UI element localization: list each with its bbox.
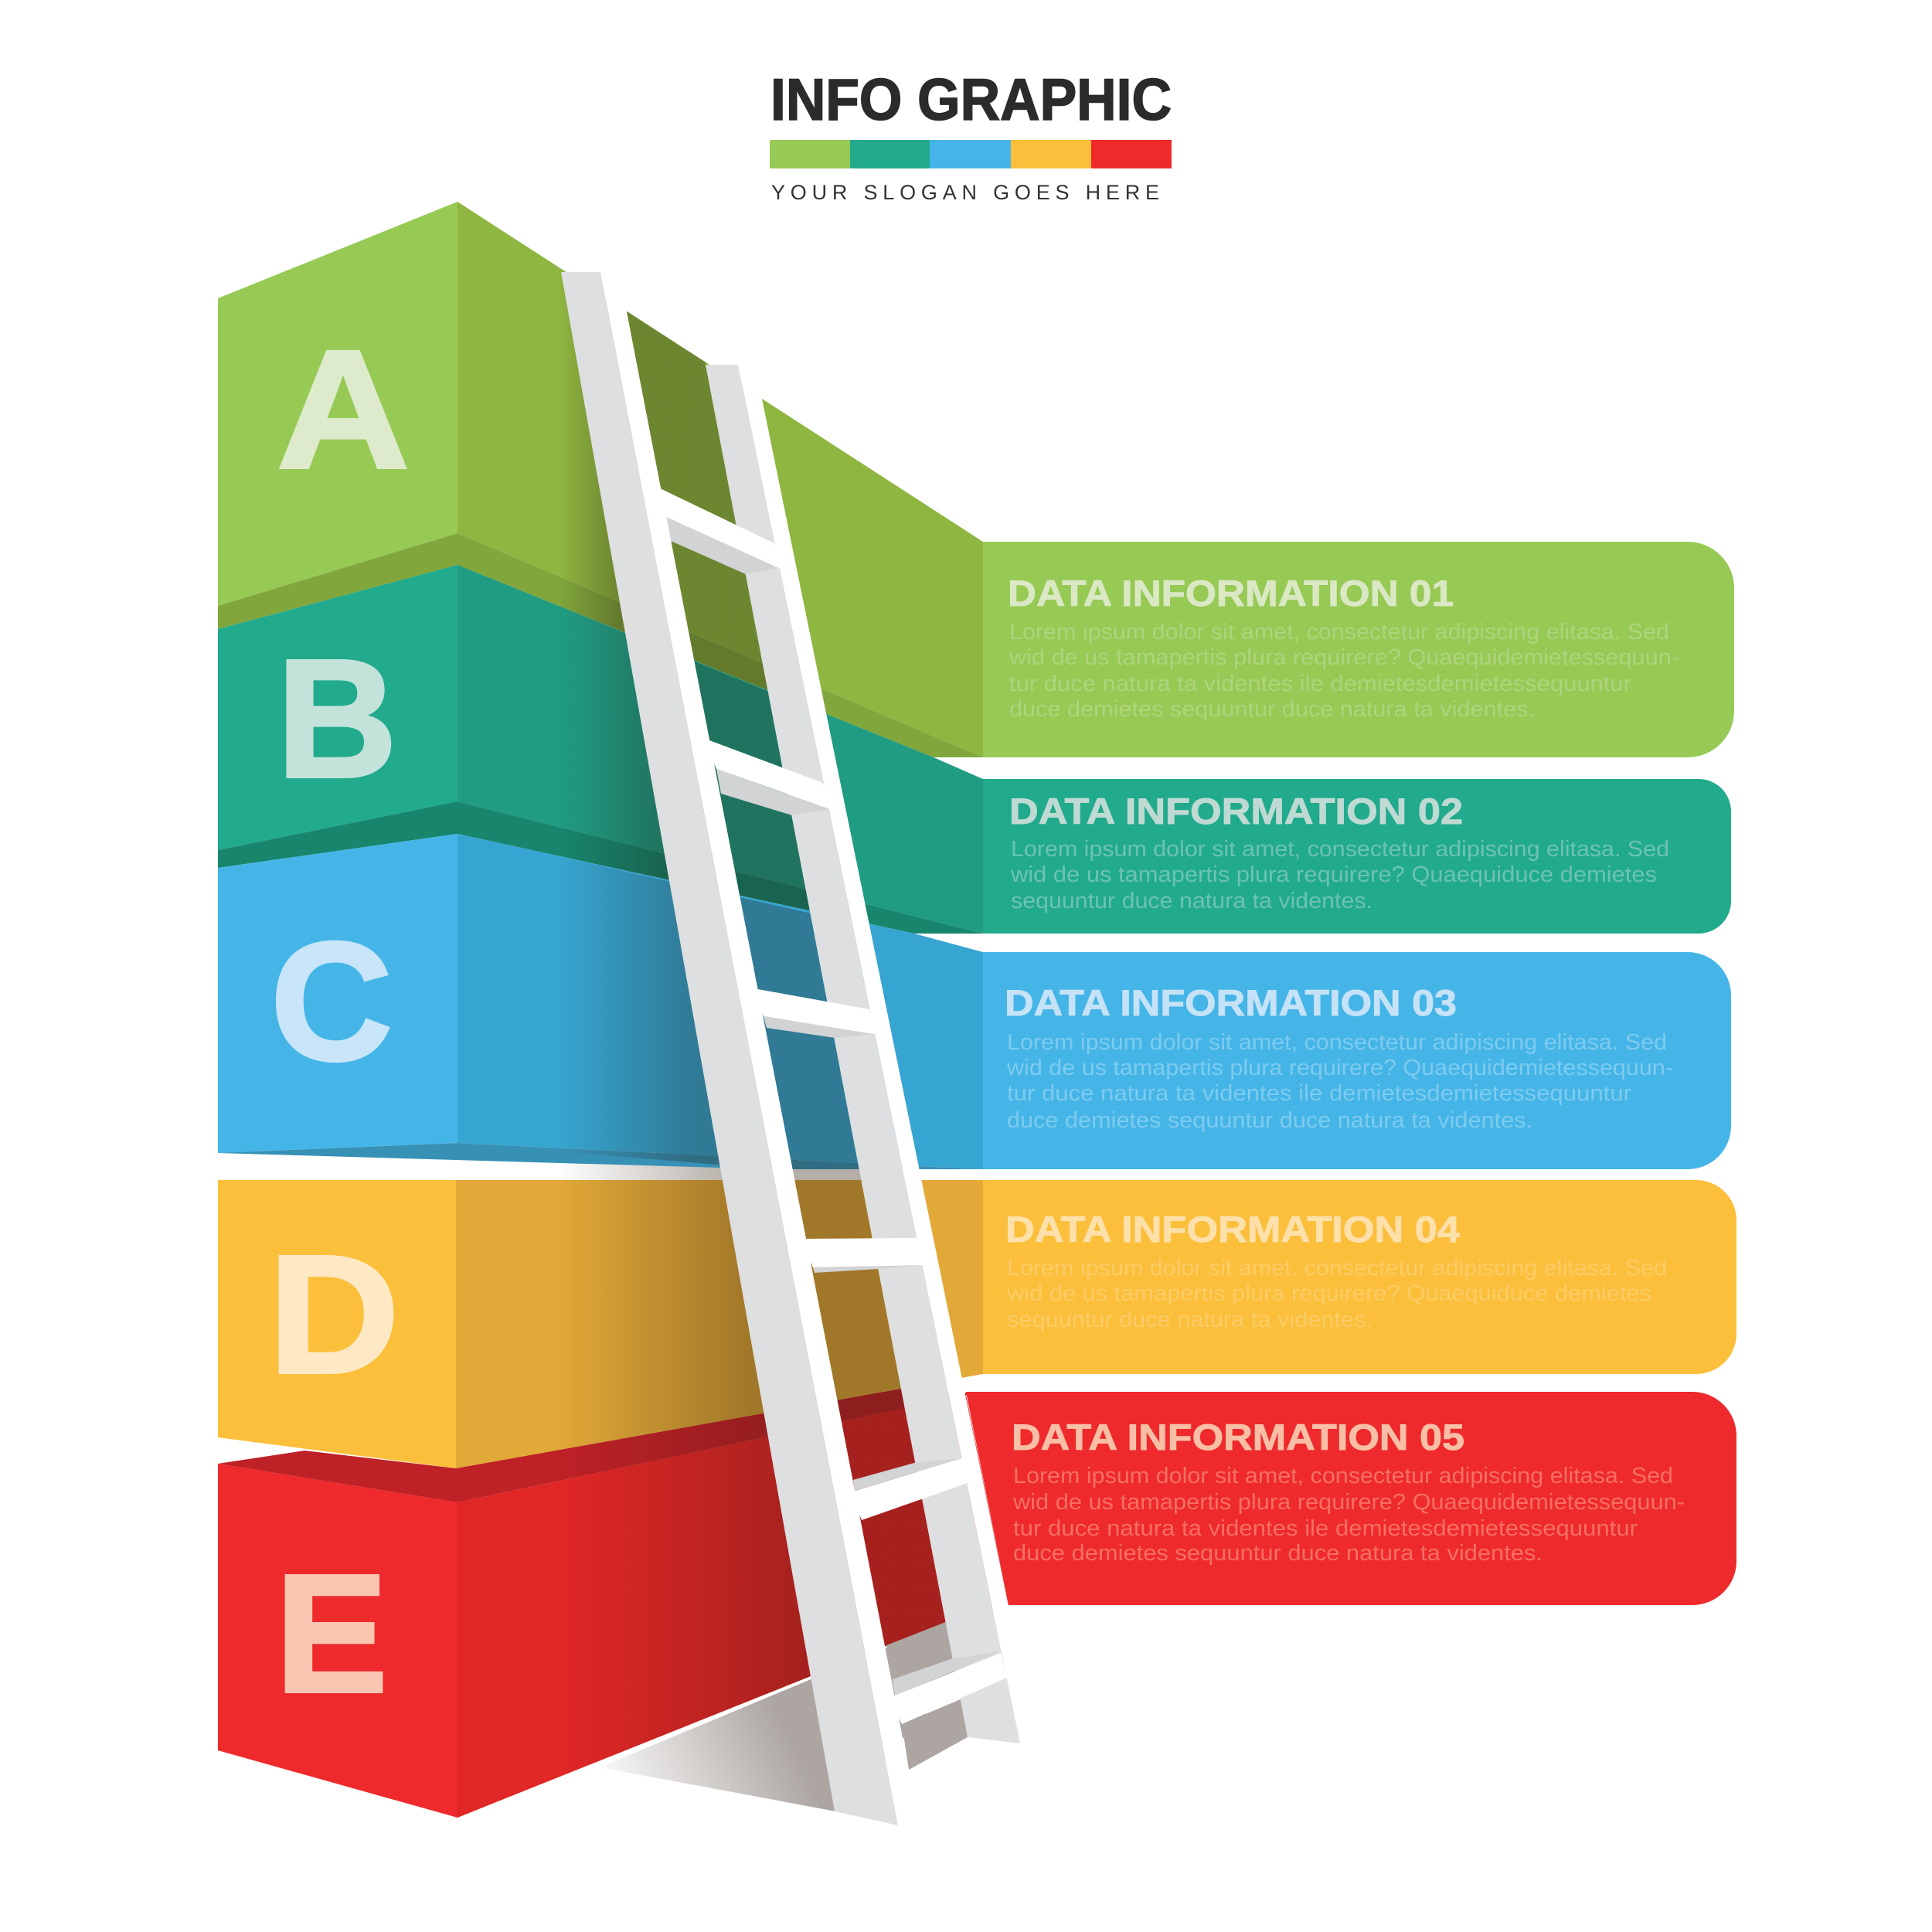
body 05 <box>1012 1464 1685 1566</box>
letter A: A <box>277 316 410 504</box>
left rail <box>561 272 920 1825</box>
body 05: tur duce natura ta videntes ile demietesdemietessequuntur <box>1013 1516 1638 1541</box>
ladder <box>561 272 1036 1825</box>
heading 04: DATA INFORMATION 04 <box>1005 1209 1460 1250</box>
panel 05 <box>966 1392 1736 1605</box>
body 03: tur duce natura ta videntes ile demietesdemietessequuntur <box>1007 1081 1631 1106</box>
body 01: duce demietes sequuntur duce natura ta videntes. <box>1009 697 1535 722</box>
body 04 <box>1006 1256 1667 1332</box>
floor shade between ladder rails <box>886 1621 968 1770</box>
block B shade <box>578 615 810 910</box>
block D <box>218 1180 983 1468</box>
letter E: E <box>275 1540 388 1728</box>
body 04: Lorem ipsum dolor sit amet, consectetur adipiscing elitasa. Sed <box>1007 1256 1667 1281</box>
body 05: Lorem ipsum dolor sit amet, consectetur adipiscing elitasa. Sed <box>1013 1464 1673 1488</box>
body 03: duce demietes sequuntur duce natura ta videntes. <box>1007 1108 1532 1133</box>
panel 01 <box>983 542 1734 757</box>
body 04: wid de us tamapertis plura requirere? Quaequiduce demietes <box>1006 1281 1651 1306</box>
title: INFO GRAPHIC <box>770 67 1172 133</box>
body 01: Lorem ipsum dolor sit amet, consectetur adipiscing elitasa. Sed <box>1009 620 1669 645</box>
body 02: wid de us tamapertis plura requirere? Quaequiduce demietes <box>1010 862 1657 887</box>
slogan: YOUR SLOGAN GOES HERE <box>771 181 1159 204</box>
body 03 <box>1006 1030 1673 1133</box>
body 01: tur duce natura ta videntes ile demietesdemietessequuntur <box>1009 672 1631 696</box>
body 04: sequuntur duce natura ta videntes. <box>1007 1308 1372 1332</box>
block E <box>218 1389 1009 1818</box>
heading 02: DATA INFORMATION 02 <box>1009 791 1463 832</box>
infographic canvas <box>218 77 1736 1825</box>
block B <box>218 565 983 934</box>
block A <box>218 202 983 757</box>
panel 04 <box>983 1180 1736 1374</box>
heading 03: DATA INFORMATION 03 <box>1005 982 1457 1023</box>
body 02: sequuntur duce natura ta videntes. <box>1011 889 1372 913</box>
panel 02 <box>983 779 1731 934</box>
body 03: Lorem ipsum dolor sit amet, consectetur adipiscing elitasa. Sed <box>1007 1030 1667 1055</box>
rung undersides <box>666 517 1001 1696</box>
shadow band between blocks C and D <box>558 1163 867 1180</box>
letter B: B <box>277 625 397 813</box>
panel 03 <box>983 952 1731 1169</box>
body 01: wid de us tamapertis plura requirere? Quaequidemietessequun- <box>1009 645 1679 670</box>
heading 05: DATA INFORMATION 05 <box>1012 1417 1464 1458</box>
right rail <box>706 365 1036 1743</box>
body 01 <box>1009 620 1679 722</box>
body 05: wid de us tamapertis plura requirere? Quaequidemietessequun- <box>1012 1490 1685 1515</box>
block D shade <box>582 1180 901 1445</box>
body 02: Lorem ipsum dolor sit amet, consectetur adipiscing elitasa. Sed <box>1011 837 1669 862</box>
body 03: wid de us tamapertis plura requirere? Quaequidemietessequun- <box>1006 1056 1673 1080</box>
heading 01: DATA INFORMATION 01 <box>1008 573 1454 614</box>
block C <box>218 834 983 1169</box>
rungs <box>657 487 1007 1724</box>
floor shadow <box>600 1611 974 1811</box>
block A shade <box>567 299 768 690</box>
body 02 <box>1010 837 1669 913</box>
body 05: duce demietes sequuntur duce natura ta videntes. <box>1013 1541 1543 1566</box>
letter C: C <box>270 908 393 1096</box>
letter D: D <box>268 1221 400 1409</box>
block C shade <box>577 861 859 1169</box>
block E shade <box>592 1389 946 1764</box>
colour bar <box>770 140 1172 168</box>
